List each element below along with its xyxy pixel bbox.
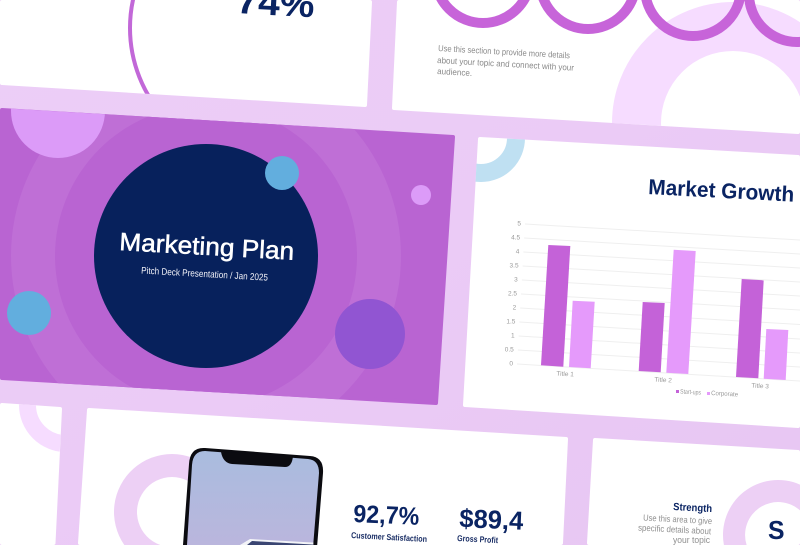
title: Marketing Plan: Marketing Plan xyxy=(119,228,295,266)
bar chart: 1.5 xyxy=(506,318,516,326)
blue circle left xyxy=(7,291,51,335)
panel: bottom-left slide xyxy=(0,403,62,545)
row of purple rings xyxy=(435,0,800,42)
light pink circle top-left xyxy=(11,108,105,158)
stat: customer satisfaction: 92,7% xyxy=(353,500,420,531)
bar chart: 5 xyxy=(517,220,521,228)
heading: Strength: Strength xyxy=(673,501,712,515)
bar chart: 4 xyxy=(516,248,520,256)
pale ring decoration xyxy=(114,454,230,545)
description text: about your topic and connect with your xyxy=(437,55,574,73)
bar chart: 4.5 xyxy=(511,234,521,242)
bar chart: 3 xyxy=(514,276,518,284)
pale ring decoration xyxy=(19,404,60,452)
description text xyxy=(437,43,574,78)
stat: gross profit: $89,4 xyxy=(459,503,525,536)
ring with letter S xyxy=(723,480,800,545)
description text: audience. xyxy=(437,66,472,78)
bar chart: Title 2 xyxy=(654,377,672,385)
bar chart: 3.5 xyxy=(510,262,519,270)
violet circle xyxy=(335,299,405,369)
bar chart: 1 xyxy=(511,332,515,340)
phone mockup xyxy=(183,448,323,545)
phone notch xyxy=(221,452,293,467)
concentric rings xyxy=(11,114,401,400)
bar chart: Start-ups xyxy=(680,389,702,397)
stat: customer satisfaction: Customer Satisfaction xyxy=(351,530,427,544)
light blue ring decoration xyxy=(476,138,525,182)
stat: customer satisfaction xyxy=(351,500,427,544)
panel: Market Growth chart slide xyxy=(463,137,800,428)
panel: bottom-middle stats slide xyxy=(80,410,566,545)
bar chart: 2 xyxy=(513,304,517,312)
small pink circle xyxy=(411,185,431,205)
blue circle top xyxy=(265,156,299,190)
body text: Use this area to give xyxy=(643,513,712,526)
bar chart: Corporate xyxy=(711,390,739,399)
subtitle: Pitch Deck Presentation / Jan 2025 xyxy=(141,266,268,284)
panel: Marketing Plan title slide xyxy=(0,108,455,405)
title: Market Growth: Market Growth xyxy=(648,175,795,207)
navy circle xyxy=(94,144,318,368)
pale ring decoration xyxy=(612,2,800,126)
bar chart xyxy=(505,220,800,399)
panel: top-left slide xyxy=(0,0,372,107)
bar chart: 2.5 xyxy=(508,290,517,298)
building in phone screen xyxy=(240,539,320,545)
bar chart: Title 3 xyxy=(751,383,769,391)
bar chart: 0 xyxy=(509,360,513,368)
large circle outline xyxy=(128,0,150,94)
bar chart: Title 1 xyxy=(556,371,574,379)
body text: specific details about xyxy=(638,523,712,536)
panel: bottom-right strength slide xyxy=(589,440,800,545)
body text: your topic xyxy=(673,535,711,545)
ring with letter S: S xyxy=(768,515,784,545)
description text: Use this section to provide more details xyxy=(438,43,570,60)
panel: top-right slide xyxy=(392,0,800,134)
bar chart: 0.5 xyxy=(505,346,514,354)
body text xyxy=(638,513,712,545)
